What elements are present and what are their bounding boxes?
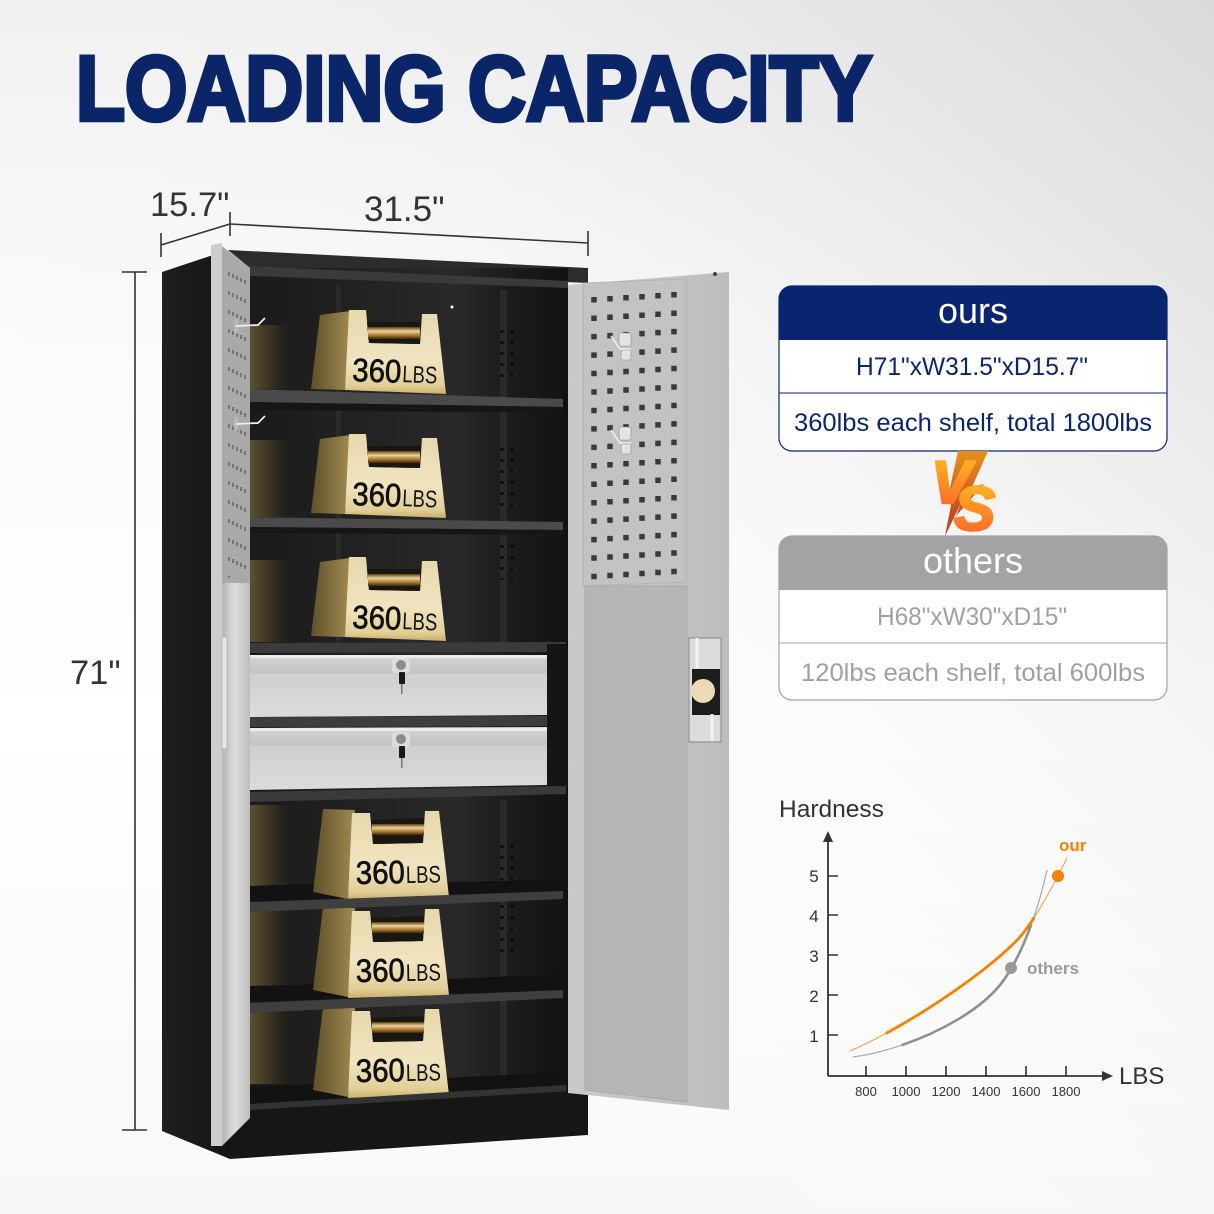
drawer 1 — [250, 655, 547, 717]
right door pegboard panel — [583, 279, 686, 586]
panel: ours — [779, 286, 1167, 451]
drawer 1 lock — [392, 658, 410, 694]
weight: shelf 4: 360 — [355, 854, 405, 891]
lower drawer band — [250, 786, 566, 802]
others dimensions: H68"xW30"xD15" — [877, 603, 1067, 631]
dimension lines and labels — [70, 186, 588, 1130]
x axis labels: 1600 — [1012, 1084, 1040, 1099]
shelf 3 — [250, 642, 566, 653]
weight: shelf 3 — [311, 557, 446, 641]
shelf 5 — [250, 990, 563, 1013]
height dimension — [70, 272, 147, 1130]
shelf 2 — [250, 517, 563, 535]
ours dimensions: H71"xW31.5"xD15.7" — [856, 353, 1088, 381]
x axis labels: 1200 — [932, 1084, 960, 1099]
weight: shelf 1 — [311, 310, 446, 394]
y axis labels — [809, 867, 819, 1046]
interior screw dot — [450, 306, 454, 308]
rear uprights — [336, 285, 507, 1085]
upright slots — [502, 330, 512, 960]
x axis labels: 1400 — [972, 1084, 1000, 1099]
shelf 4 — [250, 891, 563, 912]
width dimension: 31.5" — [364, 190, 445, 229]
marker: our — [1052, 870, 1064, 882]
y axis labels: 5 — [809, 867, 819, 886]
label: others: others — [1027, 959, 1079, 978]
left door hook 1 — [234, 318, 265, 334]
x axis title: LBS — [1119, 1063, 1164, 1090]
curve: others — [853, 870, 1047, 1057]
left door pegboard holes — [229, 272, 245, 578]
axes — [823, 831, 1113, 1081]
left door hook 2 — [234, 416, 265, 432]
cabinet top frame — [228, 250, 588, 283]
others row divider — [779, 642, 1167, 644]
y axis labels: 1 — [809, 1027, 819, 1046]
drawer 2 — [250, 727, 547, 790]
left door lower panel — [222, 583, 250, 1146]
weight: shelf 5: 360 — [355, 952, 405, 989]
chart: hardness vs lbs — [779, 796, 1164, 1099]
weight: shelf 1: 360 — [352, 352, 402, 390]
inner top lip — [250, 266, 568, 288]
weight: shelf 5: LBS — [406, 959, 441, 987]
weight: shelf 2: LBS — [402, 485, 438, 514]
panel: others — [779, 536, 1167, 700]
height dimension: 71" — [70, 654, 121, 692]
weight: shelf 1: LBS — [402, 361, 438, 390]
others header — [779, 536, 1167, 590]
right door body — [568, 272, 729, 1110]
door lock — [689, 638, 721, 742]
curve: our — [850, 858, 1067, 1051]
y axis labels: 4 — [809, 907, 819, 926]
door hinge — [713, 272, 717, 276]
x axis labels: 1000 — [892, 1084, 920, 1099]
y axis title: Hardness — [779, 796, 884, 823]
ours row divider — [779, 392, 1167, 394]
x axis labels: 1800 — [1052, 1084, 1080, 1099]
left door — [211, 243, 265, 1146]
weight: shelf 2 — [311, 434, 446, 518]
cabinet interior back wall — [250, 268, 568, 1118]
right door — [568, 272, 729, 1110]
y axis labels: 2 — [809, 987, 819, 1006]
marker: others — [1005, 962, 1017, 974]
weight: shelf 6: LBS — [406, 1059, 441, 1087]
depth dimension — [150, 186, 230, 257]
label: our: our — [1059, 836, 1087, 855]
icon: versus: V — [931, 449, 976, 516]
right door lower inset — [585, 586, 687, 1102]
weight: shelf 6 — [313, 1007, 449, 1098]
left door outer edge — [211, 243, 222, 1146]
ours heading text: ours — [938, 290, 1008, 331]
x axis labels: 800 — [855, 1084, 877, 1099]
weight: shelf 2: 360 — [352, 476, 402, 514]
left door pegboard section — [222, 246, 250, 583]
left door handle slot — [222, 637, 227, 749]
shelf 1 — [250, 389, 563, 413]
plinth base — [228, 1090, 588, 1159]
y axis labels: 3 — [809, 947, 819, 966]
cabinet — [162, 243, 729, 1159]
width dimension — [230, 190, 588, 256]
weight: shelf 4: LBS — [406, 861, 441, 889]
lower shelf top surfaces — [250, 880, 563, 1104]
weight: shelf 3: LBS — [402, 608, 438, 637]
peg hook 2 — [611, 427, 631, 454]
icon: versus: S — [954, 475, 995, 544]
ours capacity: 360lbs each shelf, total 1800lbs — [794, 409, 1152, 437]
shelf glow on left wall — [250, 325, 300, 1084]
others capacity: 120lbs each shelf, total 600lbs — [801, 659, 1145, 687]
icon: versus — [931, 449, 995, 544]
right door pegboard holes — [594, 292, 674, 584]
others heading text: others — [923, 540, 1023, 581]
cabinet floor edge — [250, 1085, 566, 1112]
weight: shelf 3: 360 — [352, 599, 402, 637]
title: LOADING CAPACITY — [76, 38, 872, 140]
peg hook 1 — [611, 333, 631, 360]
weight: shelf 5 — [313, 907, 449, 998]
weight: shelf 4 — [313, 809, 449, 900]
x axis labels — [855, 1084, 1080, 1099]
depth dimension: 15.7" — [150, 186, 229, 224]
weight: shelf 6: 360 — [355, 1052, 405, 1089]
drawer 2 lock — [392, 732, 410, 768]
drawer divider — [250, 716, 566, 727]
cabinet left side panel — [162, 255, 230, 1159]
ours header — [779, 286, 1167, 340]
drawer side rail — [547, 644, 567, 786]
